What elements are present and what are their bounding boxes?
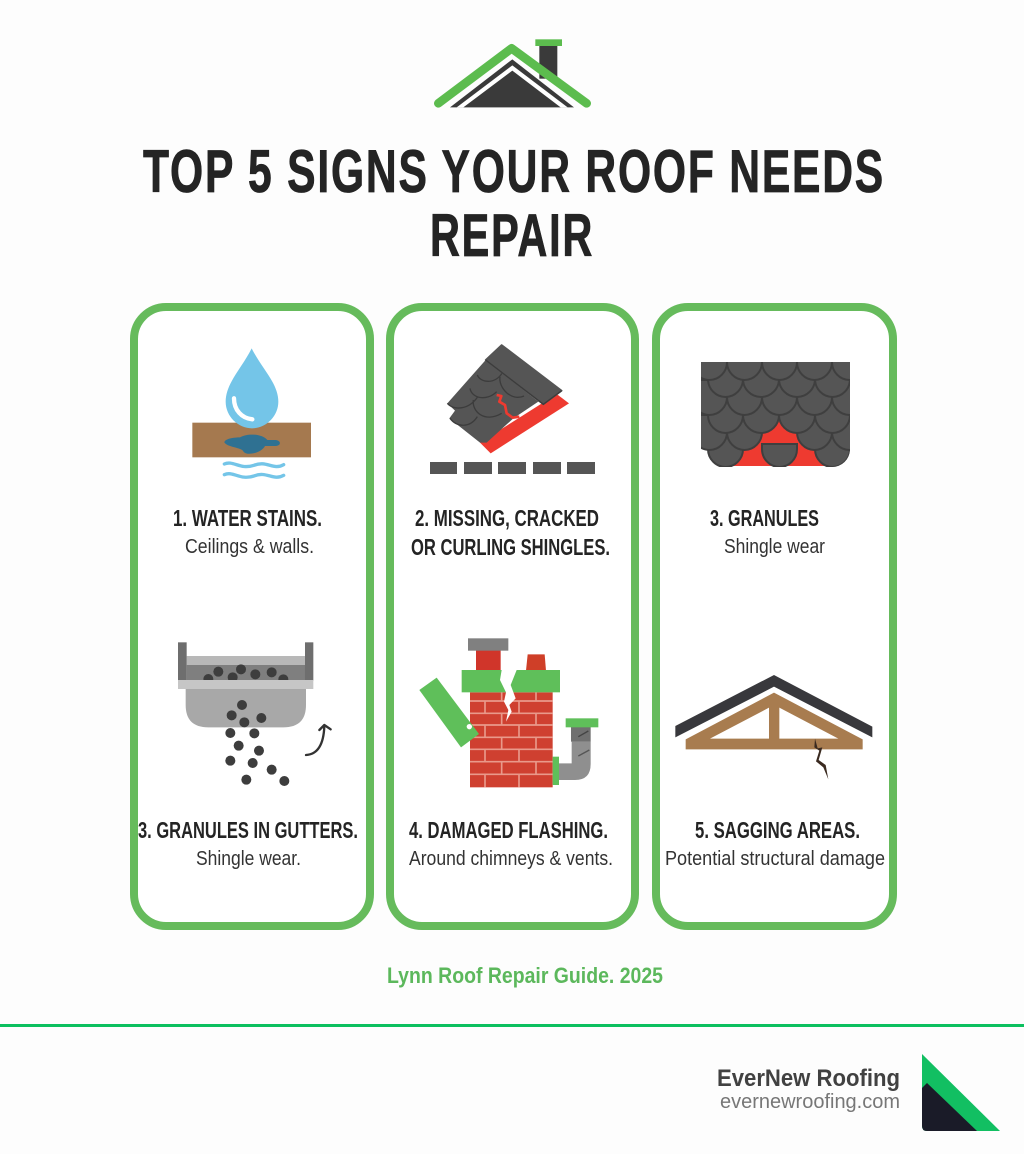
caption: guide source: Lynn Roof Repair Guide. 2025 — [387, 963, 663, 988]
icon: cracked shingles — [447, 345, 569, 453]
text: ceilings and walls: Ceilings & walls. — [185, 536, 314, 558]
text: shingle wear: Shingle wear — [724, 536, 825, 558]
icon: gutter with granules — [178, 642, 331, 786]
heading: water stains: 1. WATER STAINS. — [173, 505, 322, 531]
heading: missing, cracked or curling shingles: 2. MISSING, CRACKED — [415, 505, 599, 531]
text: shingle wear: Shingle wear. — [196, 848, 301, 870]
icon: row of missing shingle tiles — [430, 462, 595, 474]
text: around chimneys and vents: Around chimneys & vents. — [409, 848, 613, 870]
heading: sagging areas: 5. SAGGING AREAS. — [695, 817, 860, 843]
title — [143, 138, 885, 269]
footer: brand name and url — [717, 1065, 900, 1113]
heading: damaged flashing: 4. DAMAGED FLASHING. — [409, 817, 608, 843]
footer: brand name and url: EverNew Roofing — [717, 1065, 900, 1092]
icon: brand logo — [922, 1054, 1000, 1131]
panel: middle column — [390, 307, 635, 926]
icon: scalloped shingles with gap — [701, 362, 850, 467]
icon: water drop on plank — [192, 348, 311, 477]
panel: right column — [656, 307, 893, 926]
heading: missing, cracked or curling shingles: OR CURLING SHINGLES. — [411, 534, 610, 560]
heading: missing, cracked or curling shingles — [411, 505, 610, 560]
panel border — [390, 307, 635, 926]
text: potential structural damage: Potential structural damage — [665, 848, 885, 870]
icon: roof logo — [438, 39, 587, 107]
icon: chimney with damaged flashing — [419, 638, 598, 787]
footer: brand name and url: evernewroofing.com — [720, 1091, 900, 1113]
title: REPAIR — [430, 202, 594, 269]
panel border — [134, 307, 370, 926]
panel: left column — [134, 307, 370, 926]
panel border — [656, 307, 893, 926]
icon: sagging roof truss — [675, 675, 872, 779]
heading: granules in gutters: 3. GRANULES IN GUTTERS. — [138, 817, 358, 843]
heading: granules: 3. GRANULES — [710, 505, 819, 531]
